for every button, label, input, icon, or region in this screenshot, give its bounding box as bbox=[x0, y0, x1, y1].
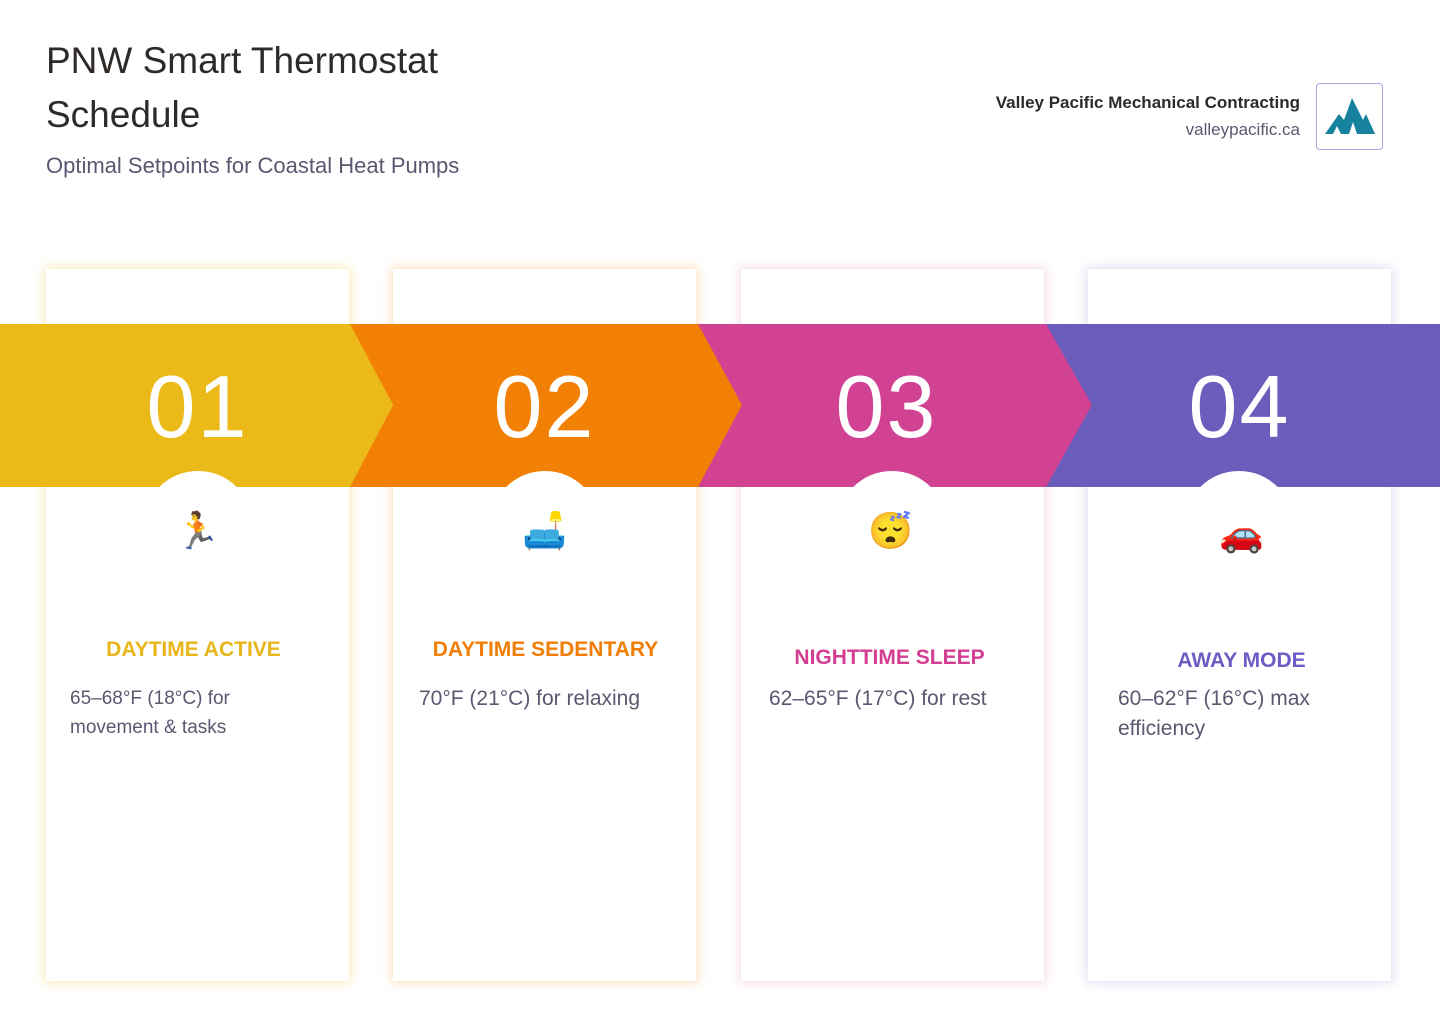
text: efficiency bbox=[1118, 717, 1205, 740]
text: movement & tasks bbox=[70, 717, 226, 738]
number 03: 03 bbox=[836, 357, 937, 456]
text: 60–62°F (16°C) max bbox=[1118, 687, 1310, 710]
step 02 bbox=[419, 357, 658, 710]
company name: Valley Pacific Mechanical Contracting bbox=[996, 93, 1300, 112]
icon: car: 🚗 bbox=[1219, 513, 1264, 555]
step 04 bbox=[1118, 357, 1310, 740]
heading: DAYTIME ACTIVE bbox=[106, 638, 281, 661]
heading: NIGHTTIME SLEEP bbox=[794, 646, 985, 669]
website: valleypacific.ca bbox=[1186, 120, 1300, 139]
text: 62–65°F (17°C) for rest bbox=[769, 687, 987, 710]
brand block bbox=[996, 83, 1383, 150]
text: 65–68°F (18°C) for bbox=[70, 688, 230, 709]
number 01: 01 bbox=[147, 357, 248, 456]
icon: sleeping: 😴 bbox=[868, 510, 913, 552]
icon: runner: 🏃 bbox=[175, 510, 220, 552]
title: PNW Smart Thermostat bbox=[46, 40, 438, 81]
number 04: 04 bbox=[1189, 357, 1290, 456]
number 02: 02 bbox=[494, 357, 595, 456]
circles bbox=[143, 471, 253, 581]
icon: couch: 🛋️ bbox=[522, 510, 567, 552]
subtitle: Optimal Setpoints for Coastal Heat Pumps bbox=[46, 153, 459, 178]
text bbox=[70, 688, 230, 738]
chevron band bbox=[0, 324, 1440, 487]
title bbox=[46, 40, 438, 135]
card shadows/cards bbox=[46, 269, 349, 981]
step 01 bbox=[70, 357, 281, 738]
heading: AWAY MODE bbox=[1177, 649, 1306, 672]
text bbox=[1118, 687, 1310, 740]
title: Schedule bbox=[46, 94, 200, 135]
text: 70°F (21°C) for relaxing bbox=[419, 687, 640, 710]
icon: mountain logo bbox=[1316, 83, 1383, 150]
step 03 bbox=[769, 357, 987, 710]
heading: DAYTIME SEDENTARY bbox=[433, 638, 658, 661]
